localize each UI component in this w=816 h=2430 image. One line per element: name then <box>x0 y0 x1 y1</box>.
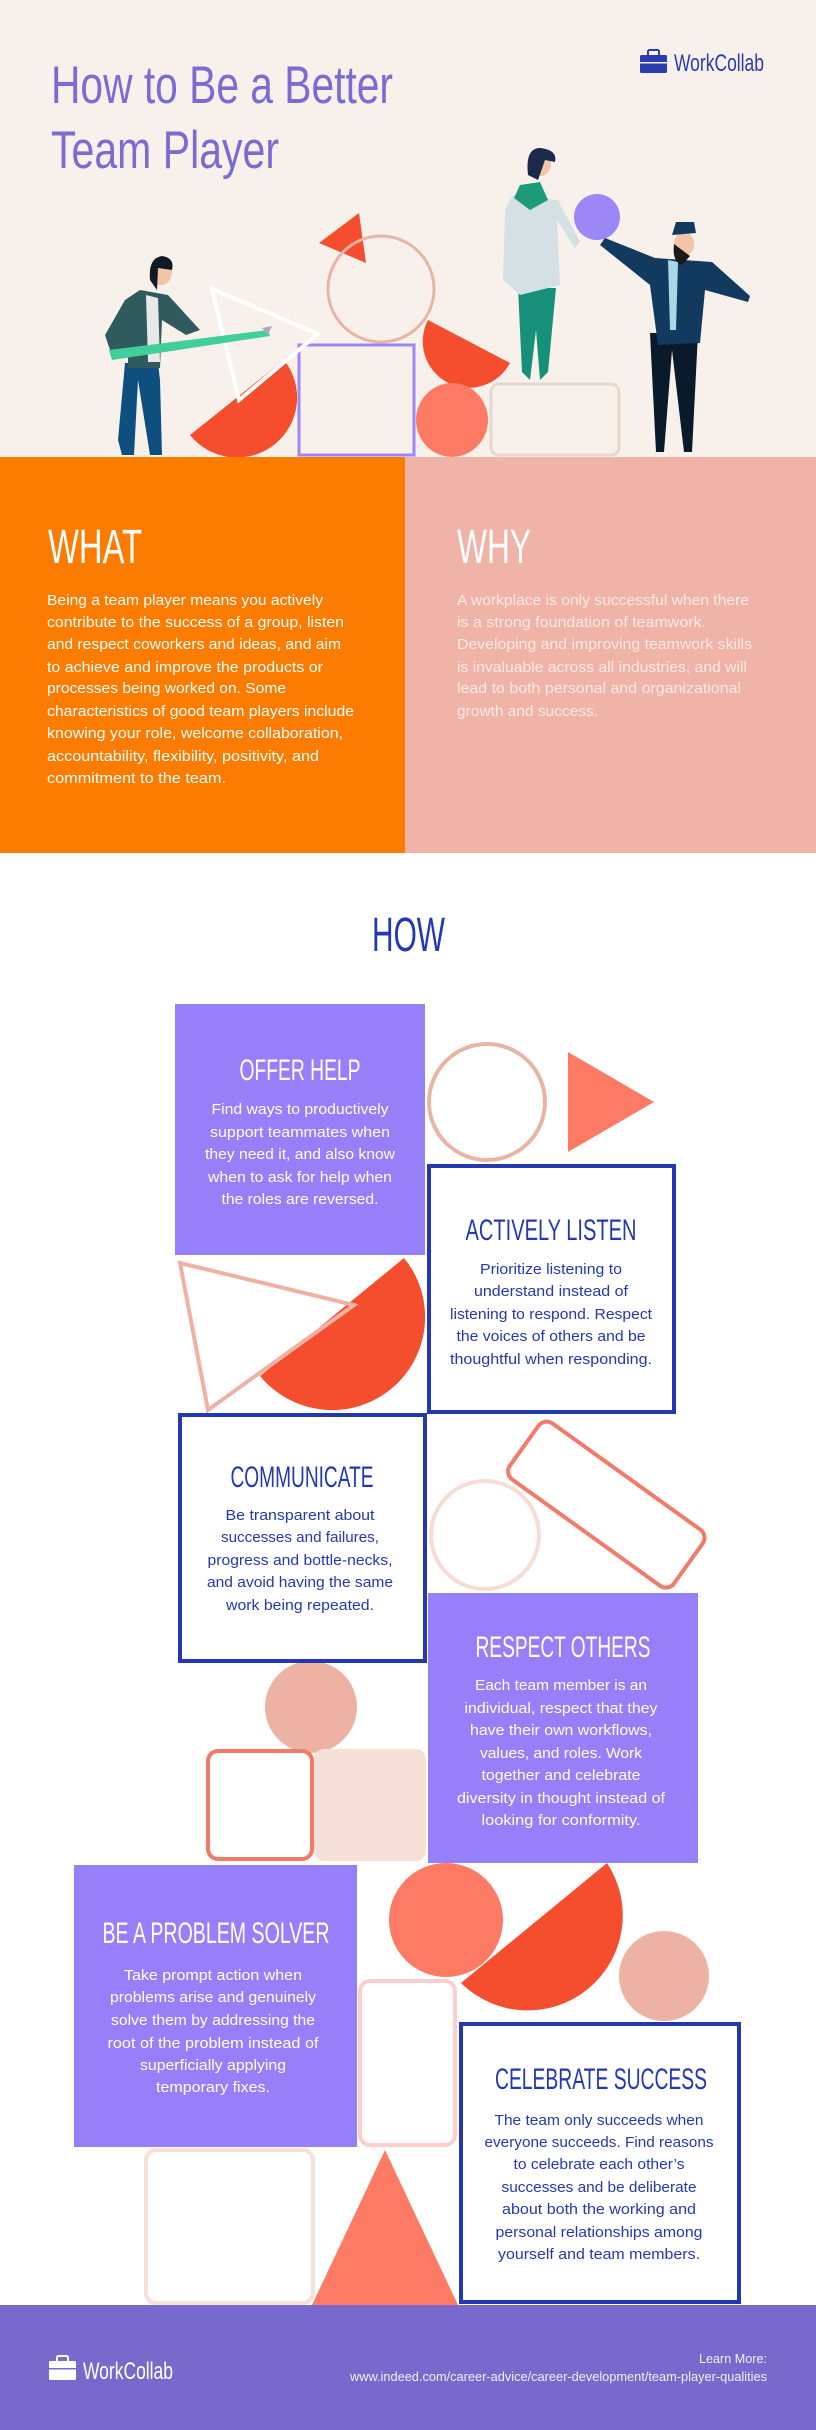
card: respect others <box>428 1593 698 1863</box>
panel: what: commitment to the team. <box>47 770 226 787</box>
card: offer help: OFFER HELP <box>240 1054 360 1087</box>
card: offer help: they need it, and also know <box>205 1147 396 1163</box>
panel: what: contribute to the success of a group, listen <box>47 614 344 631</box>
card: communicate: successes and failures, <box>221 1530 379 1546</box>
panel: what: knowing your role, welcome collaboration, <box>47 725 343 742</box>
card: actively listen: the voices of others and be <box>456 1329 646 1345</box>
logo: footer <box>49 2356 173 2385</box>
source text: www.indeed.com/career-advice/career-development/team-player-qualities <box>349 2369 767 2384</box>
panel: what <box>0 457 405 853</box>
title <box>51 56 393 180</box>
panel: why <box>405 457 816 853</box>
illustration: team building shapes <box>105 148 750 458</box>
card: celebrate success: The team only succeeds when <box>494 2112 704 2129</box>
card: respect others: individual, respect that they <box>464 1701 658 1717</box>
card: respect others: looking for conformity. <box>482 1813 640 1829</box>
figure: standing woman <box>503 148 580 380</box>
card: actively listen <box>429 1166 674 1412</box>
panel: why: A workplace is only successful when there <box>457 592 749 609</box>
card: celebrate success <box>461 2024 739 2302</box>
panel: what: characteristics of good team players include <box>47 703 354 720</box>
card: celebrate success: personal relationships among <box>496 2224 702 2241</box>
panel: what: WHAT <box>48 521 142 574</box>
panel: what: processes being worked on. Some <box>47 680 286 697</box>
card: actively listen: listening to respond. Respect <box>450 1307 652 1323</box>
card: respect others: have their own workflows, <box>470 1723 652 1739</box>
logo: header <box>640 50 764 77</box>
title: How to Be a Better <box>51 56 393 115</box>
logo: header: WorkCollab <box>674 50 764 77</box>
panel: why: is a strong foundation of teamwork. <box>457 614 706 631</box>
card: offer help: support teammates when <box>210 1125 390 1141</box>
card: actively listen: understand instead of <box>474 1284 629 1300</box>
header background <box>0 0 816 457</box>
card: be a problem solver: problems arise and genuinely <box>110 1989 317 2006</box>
card: be a problem solver: Take prompt action when <box>124 1967 302 1984</box>
footer <box>0 2305 816 2430</box>
card: be a problem solver: root of the problem instead of <box>108 2035 319 2052</box>
card: communicate: COMMUNICATE <box>230 1461 374 1494</box>
panel: why: is invaluable across all industries, and will <box>457 659 747 676</box>
decorative shapes: how section <box>146 1044 709 2305</box>
card: celebrate success: yourself and team members. <box>498 2246 700 2263</box>
card: be a problem solver: BE A PROBLEM SOLVER <box>102 1917 330 1950</box>
card: be a problem solver <box>74 1865 357 2147</box>
panel: why: lead to both personal and organizational <box>457 680 741 697</box>
panel: why: growth and success. <box>457 703 598 720</box>
panel: why: WHY <box>457 521 531 574</box>
card: celebrate success: everyone succeeds. Find reasons <box>484 2134 714 2151</box>
card: be a problem solver: temporary fixes. <box>156 2079 270 2096</box>
card: respect others: diversity in thought instead of <box>457 1791 666 1807</box>
card: offer help: Find ways to productively <box>212 1102 389 1118</box>
title: Team Player <box>51 121 279 180</box>
card: actively listen: Prioritize listening to <box>480 1262 622 1278</box>
figure: left woman <box>105 256 272 455</box>
card: communicate: Be transparent about <box>226 1508 374 1524</box>
source text: Learn More: <box>699 2351 767 2366</box>
card: respect others: Each team member is an <box>475 1678 647 1694</box>
panel: what: Being a team player means you actively <box>47 592 324 609</box>
heading: how: HOW <box>372 909 445 962</box>
card: be a problem solver: solve them by addressing the <box>111 2012 315 2029</box>
card: celebrate success: to celebrate each other’s <box>514 2156 684 2173</box>
panel: what: to achieve and improve the products or <box>47 659 323 676</box>
panel: why: Developing and improving teamwork skills <box>457 636 752 653</box>
panel: what: and respect coworkers and ideas, and aim <box>47 636 341 653</box>
card: communicate: and avoid having the same <box>207 1575 393 1591</box>
card: offer help <box>175 1004 425 1255</box>
card: respect others: values, and roles. Work <box>480 1746 643 1762</box>
source text <box>349 2351 767 2384</box>
card: communicate: progress and bottle-necks, <box>208 1553 392 1569</box>
card: respect others: RESPECT OTHERS <box>476 1631 650 1664</box>
card: celebrate success: CELEBRATE SUCCESS <box>495 2063 707 2096</box>
card: communicate: work being repeated. <box>225 1598 374 1614</box>
logo: footer: WorkCollab <box>83 2358 173 2385</box>
card: communicate <box>180 1415 425 1661</box>
card: be a problem solver: superficially applying <box>140 2057 286 2074</box>
card: respect others: together and celebrate <box>482 1768 640 1784</box>
card: offer help: the roles are reversed. <box>222 1192 378 1208</box>
card: celebrate success: successes and be deliberate <box>502 2179 696 2196</box>
figure: man <box>600 222 750 452</box>
card: offer help: when to ask for help when <box>207 1170 392 1186</box>
card: actively listen: ACTIVELY LISTEN <box>466 1214 636 1247</box>
card: actively listen: thoughtful when responding. <box>450 1352 652 1368</box>
panel: what: accountability, flexibility, positivity, and <box>47 748 319 765</box>
card: celebrate success: about both the working and <box>502 2201 696 2218</box>
